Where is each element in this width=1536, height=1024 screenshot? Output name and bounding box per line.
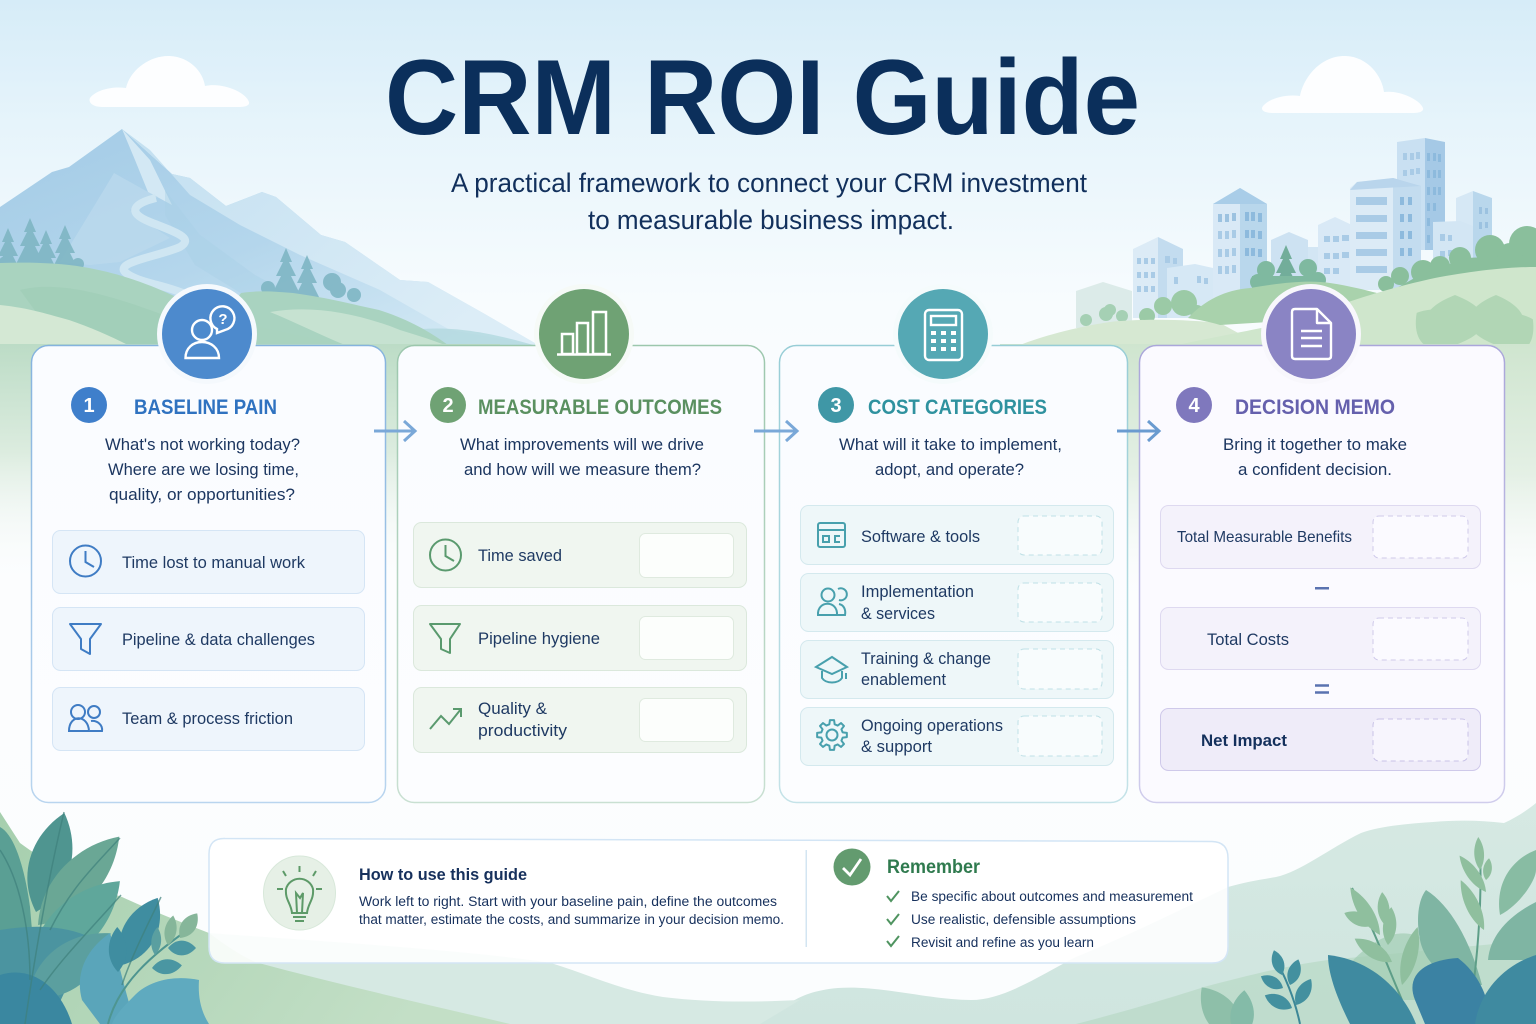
arrow: step 2 to 3: [754, 421, 797, 441]
how to use text: Work left to right. Start with your baseline pain, define the outcomes: [359, 894, 777, 909]
icon: document: [1261, 284, 1361, 384]
panel: cost categories: [780, 284, 1128, 802]
row: time saved: [414, 522, 746, 588]
B5: [1271, 232, 1308, 285]
row: net impact: [1160, 708, 1480, 770]
illustration: green hills left: [0, 263, 540, 584]
row: software and tools: Software & tools: [861, 528, 980, 546]
heading: BASELINE PAIN: [134, 396, 277, 419]
panel: measurable outcomes: [398, 284, 764, 802]
equals operator: [1315, 686, 1329, 692]
subtitle: [451, 168, 1087, 235]
step number 1: 1: [83, 395, 95, 417]
panel: baseline pain: [32, 284, 386, 802]
heading: DECISION MEMO: [1235, 396, 1395, 419]
description: What will it take to implement,: [839, 435, 1062, 454]
illustration: foliage bottom right: [1189, 837, 1536, 1024]
row: ongoing operations: Ongoing operations: [861, 717, 1003, 735]
description: What's not working today?: [105, 435, 300, 454]
remember heading: Remember: [887, 857, 981, 878]
minus operator: [1315, 587, 1329, 590]
description: [839, 435, 1062, 479]
row: total costs: [1160, 608, 1480, 670]
step number 3: 3: [830, 395, 842, 417]
how to use text: that matter, estimate the costs, and summarize in your decision memo.: [359, 912, 784, 927]
remember list: Be specific about outcomes and measurement: [911, 889, 1193, 904]
row: quality and productivity: [414, 688, 746, 752]
title: CRM ROI Guide: [385, 37, 1140, 157]
icon: person with question: [157, 284, 257, 384]
icon: light bulb: [264, 856, 336, 930]
description: [1223, 435, 1407, 479]
description: quality, or opportunities?: [109, 485, 295, 504]
B2, B3: [1133, 237, 1158, 318]
row: team friction: Team & process friction: [122, 709, 293, 728]
description: [460, 435, 704, 479]
description: Bring it together to make: [1223, 435, 1407, 454]
row: ongoing operations: [800, 708, 1114, 766]
heading: COST CATEGORIES: [868, 396, 1047, 419]
how to use text: How to use this guide: [359, 865, 527, 884]
description: [105, 435, 300, 504]
row: quality and productivity: productivity: [478, 721, 568, 740]
row: ongoing operations: & support: [861, 738, 932, 756]
icon: check badge: [834, 848, 870, 886]
row: training and change: Training & change: [861, 650, 991, 668]
row: software and tools: [800, 506, 1114, 564]
row: pipeline and data: [52, 608, 364, 670]
row: net impact: Net Impact: [1201, 731, 1287, 750]
row: training and change: enablement: [861, 671, 946, 689]
how to use text: [359, 865, 784, 927]
B6: [1318, 217, 1352, 295]
description: a confident decision.: [1238, 460, 1392, 479]
row: team friction: [52, 688, 364, 750]
illustration: city buildings: [1076, 138, 1492, 328]
illustration: mountains and trees: [0, 129, 540, 346]
remember list: Use realistic, defensible assumptions: [911, 912, 1136, 927]
step number 2: [430, 387, 466, 423]
windows: [1137, 152, 1488, 292]
B7: [1350, 178, 1421, 290]
icon: bar chart: [534, 284, 634, 384]
river: [124, 198, 185, 294]
illustration: bottom hills: [0, 803, 1536, 1024]
row: time lost: Time lost to manual work: [122, 553, 305, 572]
panel: how to use and remember: [209, 838, 1228, 963]
subtitle: A practical framework to connect your CRM investment: [451, 168, 1087, 198]
icon: calculator: [893, 284, 993, 384]
illustration: green hills and bushes right: [1000, 226, 1536, 604]
description: adopt, and operate?: [875, 460, 1024, 479]
trees: [0, 218, 361, 309]
B4: [1213, 188, 1240, 300]
step number 4: [1176, 387, 1212, 423]
description: and how will we measure them?: [464, 460, 701, 479]
row: implementation and services: Implementation: [861, 583, 974, 601]
panel: decision memo: [1140, 284, 1504, 802]
row: quality and productivity: Quality &: [478, 699, 548, 718]
row: total measurable benefits: [1160, 506, 1480, 568]
heading: MEASURABLE OUTCOMES: [478, 396, 722, 419]
row: implementation and services: [800, 574, 1114, 632]
cloud left: [90, 56, 249, 107]
cloud right: [1262, 56, 1423, 113]
row: pipeline and data: Pipeline & data challenges: [122, 630, 315, 649]
step number 3: [818, 387, 854, 423]
step number 4: 4: [1188, 395, 1200, 417]
vertical divider: [806, 850, 807, 947]
subtitle: to measurable business impact.: [588, 205, 954, 235]
row: implementation and services: & services: [861, 605, 935, 623]
step number 1: [71, 387, 107, 423]
step number 2: 2: [442, 395, 454, 417]
arrow: step 1 to 2: [374, 421, 415, 441]
description: What improvements will we drive: [460, 435, 704, 454]
row: time lost: [52, 530, 364, 594]
row: pipeline hygiene: [414, 606, 746, 670]
row: total costs: Total Costs: [1207, 631, 1289, 649]
remember list: [887, 889, 1193, 950]
row: training and change: [800, 640, 1114, 698]
row: pipeline hygiene: Pipeline hygiene: [478, 629, 600, 648]
illustration: foliage bottom left: [0, 807, 209, 1024]
row: total measurable benefits: Total Measurable Benefits: [1177, 529, 1352, 546]
description: Where are we losing time,: [108, 460, 299, 479]
tower: [1397, 138, 1425, 250]
row: time saved: Time saved: [478, 546, 562, 565]
remember list: Revisit and refine as you learn: [911, 935, 1094, 950]
icon: person with question: ?: [218, 311, 228, 328]
right building: [1456, 191, 1473, 262]
arrow: step 3 to 4: [1117, 421, 1159, 441]
far faint: [1076, 282, 1132, 328]
